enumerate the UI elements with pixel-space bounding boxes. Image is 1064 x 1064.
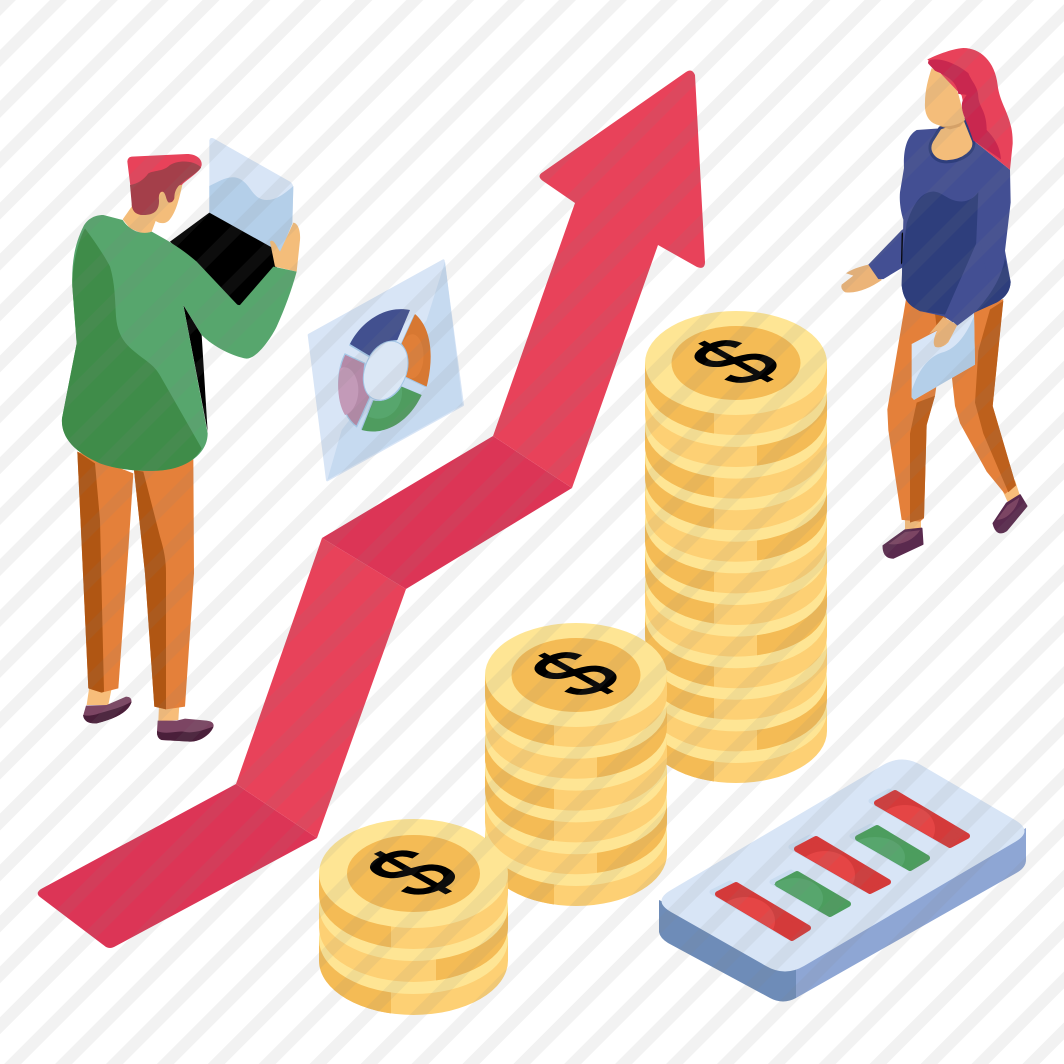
bar shadows: [712, 791, 961, 936]
coin stack: medium: $: [505, 636, 646, 711]
bar chart slab: [659, 760, 1026, 1002]
woman far arm: [868, 224, 910, 279]
woman neck: [930, 120, 974, 162]
man: [62, 138, 300, 742]
pie segment: pink: [338, 354, 370, 427]
woman near hand: [929, 317, 957, 347]
man hair: [127, 154, 202, 215]
man hand: [270, 223, 300, 272]
coin stack: medium: [485, 623, 667, 906]
woman sleeve cuff: [945, 237, 990, 326]
coin stack: large: [645, 311, 827, 783]
woman: [841, 48, 1027, 558]
pie segment: blue: [349, 309, 410, 357]
coin stack: small: [319, 819, 508, 1015]
pie segment: green: [361, 386, 422, 431]
under arm gap: [183, 305, 208, 432]
coin stack: small: $: [339, 833, 485, 911]
slab top face: [662, 760, 1024, 972]
coin stack: large: $: [665, 324, 806, 399]
pie segment: orange: [401, 314, 431, 387]
paper: [912, 311, 975, 400]
laptop screen: [209, 138, 293, 253]
woman face: [925, 68, 965, 126]
laptop base: [170, 213, 277, 307]
woman far hand: [841, 261, 882, 293]
man neck and face: [123, 183, 183, 234]
woman sweater: [900, 128, 1011, 325]
woman hair: [927, 48, 1013, 170]
woman legs: [883, 299, 1027, 558]
pie chart card: [309, 261, 463, 480]
man sweater: [62, 215, 297, 471]
man legs: [77, 452, 214, 742]
slab side faces: [659, 828, 1026, 1002]
woman chin shadow: [939, 120, 965, 129]
arm gap: [901, 224, 910, 265]
pie centre: [355, 334, 416, 407]
growth arrow: [38, 71, 705, 948]
bars: [715, 793, 967, 945]
